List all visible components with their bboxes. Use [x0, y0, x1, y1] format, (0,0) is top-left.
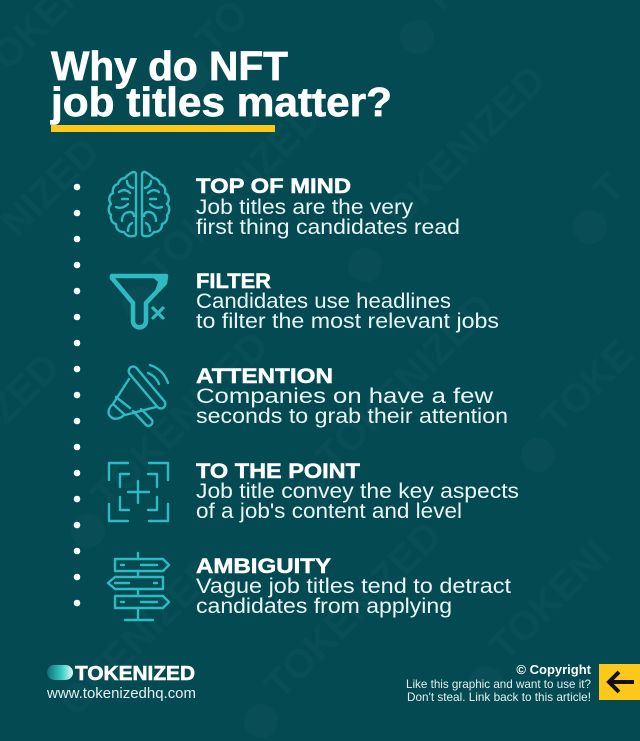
text: TOKENI [481, 532, 619, 669]
text: attention: Companies on have a few [196, 384, 494, 408]
text: ambiguity: AMBIGUITY [196, 555, 331, 578]
text: to the point: TO THE POINT [196, 460, 360, 483]
text: attention: seconds to grab their attention [196, 404, 508, 428]
text: attention: ATTENTION [196, 365, 333, 388]
text: OKENIZED [51, 547, 229, 724]
website url: www.tokenizedhq.com [46, 685, 196, 702]
text: filter: Candidates use headlines [196, 289, 451, 313]
text: filter [196, 270, 499, 333]
copyright notice [406, 662, 592, 704]
text: attention [196, 365, 508, 428]
text: TOKE [533, 332, 640, 441]
text: TOKENIZED [135, 95, 329, 289]
title: Why do NFT [51, 43, 288, 89]
copyright notice: Don't steal. Link back to this article! [407, 690, 591, 704]
icon: brain [109, 172, 169, 236]
logo: TOKENIZED [75, 663, 195, 685]
text: to the point [196, 460, 519, 523]
text: top of mind [196, 175, 460, 239]
copyright notice: Like this graphic and want to use it? [406, 677, 591, 691]
text: TOKENIZED [256, 513, 450, 707]
dotted timeline [74, 184, 80, 606]
icon: signpost [108, 553, 169, 620]
text: top of mind: Job titles are the very [196, 195, 413, 219]
text: T [585, 165, 634, 213]
text: filter: to filter the most relevant jobs [196, 309, 499, 333]
arrow badge [599, 664, 640, 700]
copyright notice: © Copyright [516, 662, 592, 677]
text: top of mind: first thing candidates read [196, 215, 460, 239]
text: ambiguity: Vague job titles tend to detract [196, 574, 511, 598]
title underline [51, 125, 275, 132]
title [50, 43, 392, 125]
text: top of mind: TOP OF MIND [196, 175, 351, 198]
text: TOKENIZED [308, 285, 502, 479]
text: filter: FILTER [196, 270, 271, 293]
icon: focus frame [109, 463, 168, 521]
text: ambiguity: candidates from applying [196, 594, 452, 618]
text: ambiguity [196, 555, 511, 618]
icon: filter [112, 275, 167, 328]
text: to the point: of a job's content and level [196, 499, 462, 523]
text: TOKENIZED [83, 323, 277, 517]
title: job titles matter? [50, 79, 392, 125]
icon: megaphone [109, 365, 168, 426]
text: to the point: Job title convey the key aspects [196, 479, 519, 503]
text: TOKENIZED [360, 57, 554, 251]
